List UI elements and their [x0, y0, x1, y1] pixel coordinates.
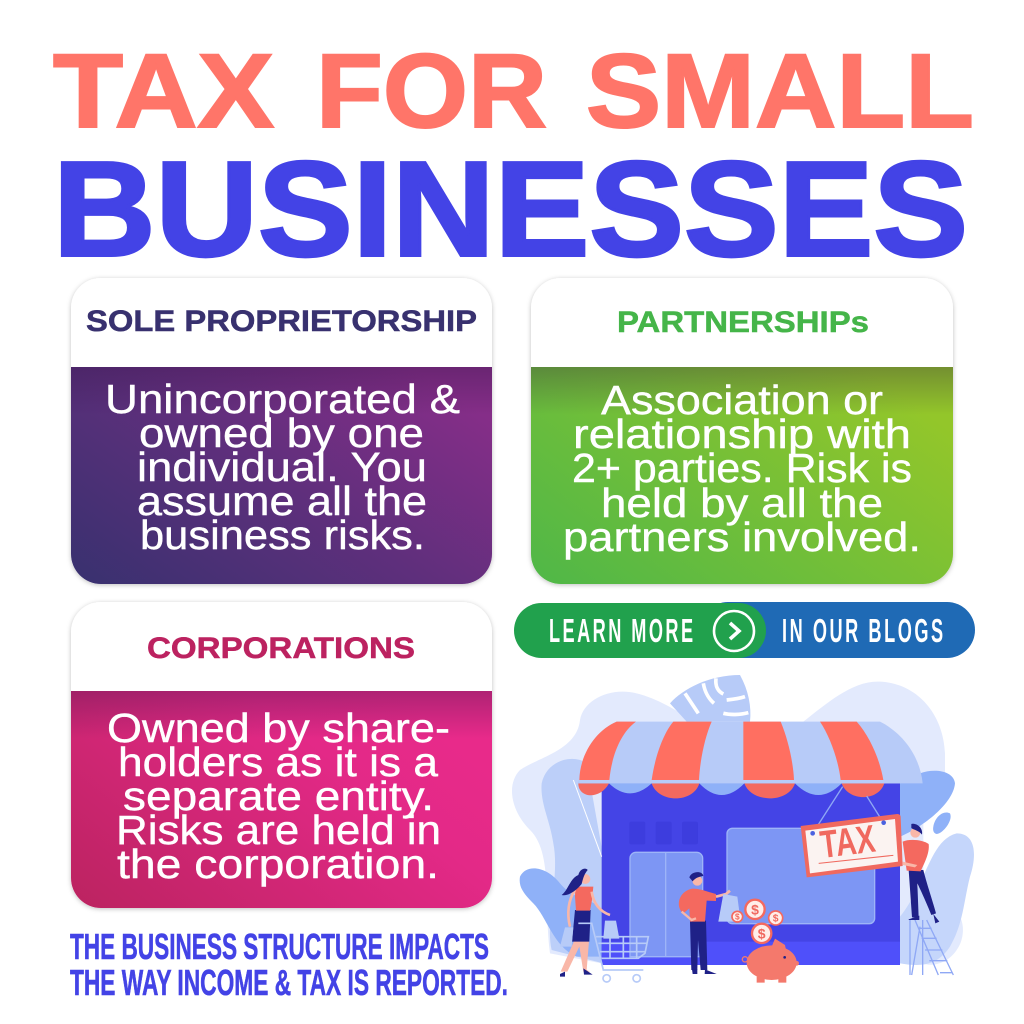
- panel: sole proprietorship: [71, 278, 492, 584]
- store building: [602, 783, 900, 965]
- heading: corporations: CORPORATIONS: [147, 632, 415, 665]
- sign: tax: [801, 787, 917, 877]
- bag: [560, 927, 573, 947]
- text block: corporations description: [107, 705, 450, 887]
- text block: footer note: THE BUSINESS STRUCTURE IMPACTS: [70, 926, 489, 967]
- coins: $: [751, 901, 759, 917]
- background blobs: [512, 682, 974, 965]
- shopping bag: [718, 894, 741, 922]
- text block: sole proprietorship description: owned by one: [139, 410, 424, 456]
- shopper man: [679, 872, 741, 974]
- text block: footer note: [70, 926, 508, 1003]
- text block: sole proprietorship description: business risks.: [140, 512, 425, 558]
- illustration: storefront: [512, 675, 974, 983]
- woman with cart: [560, 869, 648, 982]
- icon: monstera leaf: [670, 675, 750, 722]
- heading: sole proprietorship: SOLE PROPRIETORSHIP: [86, 305, 477, 338]
- title: [53, 33, 974, 284]
- piggy bank: [742, 939, 799, 983]
- text block: sole proprietorship description: [105, 376, 460, 558]
- text block: partnerships description: held by all the: [601, 480, 883, 526]
- callout: learn more button: LEARN MORE: [549, 612, 693, 649]
- sign: tax: TAX: [818, 818, 878, 867]
- coins: $: [735, 912, 740, 922]
- text block: partnerships description: relationship with: [573, 411, 911, 457]
- ladder: [910, 920, 953, 975]
- coins: $: [758, 925, 766, 941]
- text block: corporations description: separate entity.: [123, 773, 434, 819]
- text block: corporations description: the corporation.: [117, 841, 439, 887]
- panel: partnerships: [531, 278, 953, 584]
- text block: sole proprietorship description: assume all the: [137, 478, 427, 524]
- text block: corporations description: Risks are held in: [116, 807, 441, 853]
- decorative rope left: [573, 780, 602, 857]
- text block: partnerships description: [563, 377, 921, 560]
- text block: partnerships description: partners involved.: [563, 514, 921, 560]
- heading: partnerships: PARTNERSHIPs: [617, 306, 869, 339]
- text block: partnerships description: Association or: [601, 377, 883, 423]
- door: [630, 852, 703, 957]
- coins: $: [773, 914, 779, 925]
- coins: [732, 900, 783, 943]
- striped awning: [578, 722, 923, 798]
- text block: sole proprietorship description: individual. You: [137, 444, 427, 490]
- icon: arrow circle: [714, 611, 754, 651]
- title: BUSINESSES: [53, 134, 968, 284]
- text block: footer note: THE WAY INCOME & TAX IS REPORTED.: [70, 962, 508, 1003]
- title: TAX: [53, 33, 274, 150]
- panel: corporations: [71, 602, 492, 908]
- callout: learn more button: [514, 602, 975, 658]
- text block: sole proprietorship description: Unincorporated &: [105, 376, 460, 422]
- title: FOR: [316, 33, 547, 150]
- man on ladder: [903, 824, 939, 923]
- window: [727, 828, 875, 924]
- shopping cart: [578, 923, 648, 982]
- callout: learn more button: IN OUR BLOGS: [782, 612, 943, 649]
- text block: corporations description: holders as it is a: [118, 739, 438, 785]
- title: SMALL: [586, 33, 974, 150]
- text block: partnerships description: 2+ parties. Risk is: [572, 445, 912, 491]
- text block: corporations description: Owned by share-: [107, 705, 450, 751]
